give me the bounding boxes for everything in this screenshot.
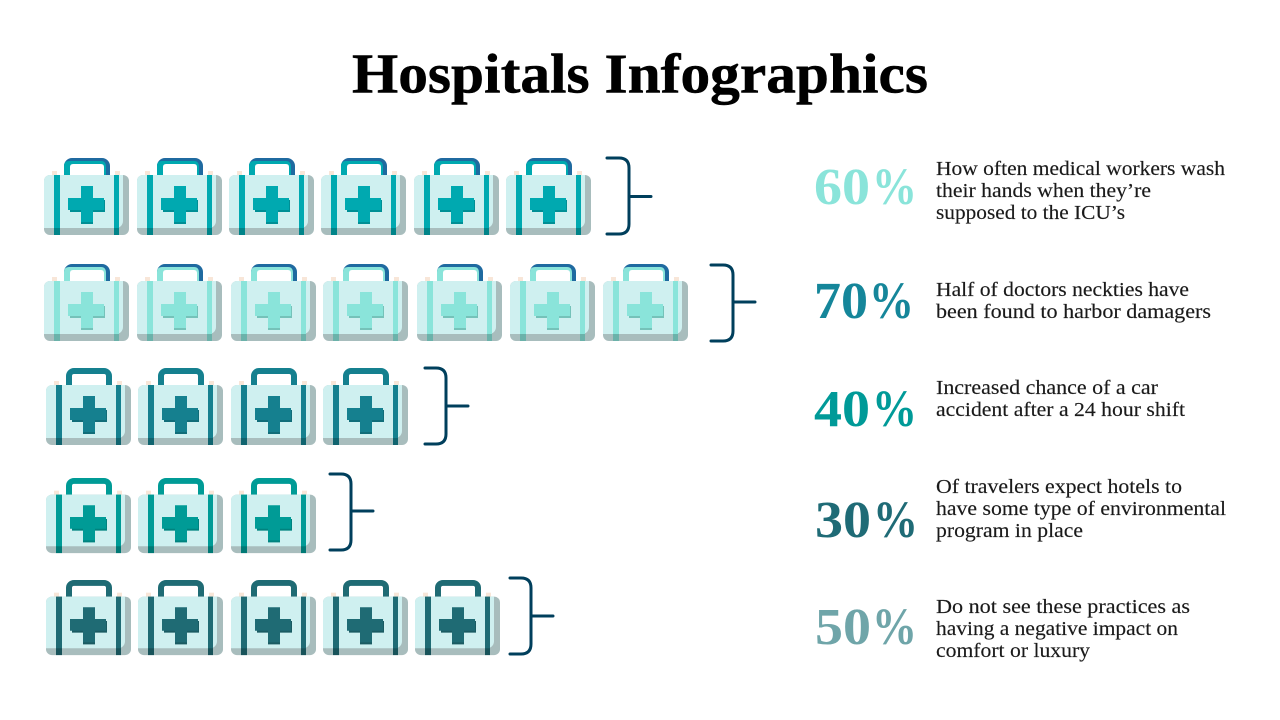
row 3: four first aid kits <box>46 371 408 445</box>
description: 50%: comfort or luxury <box>936 640 1090 662</box>
icon: first aid kit <box>231 371 316 445</box>
bracket: row 4 <box>330 474 373 550</box>
icon: first aid kit <box>46 583 131 655</box>
bracket: row 5 <box>510 578 553 654</box>
icon: first aid kit <box>231 481 316 553</box>
stat: 30%: % <box>873 492 918 549</box>
icon: first aid kit <box>415 583 500 655</box>
row 5: five first aid kits <box>46 583 500 655</box>
description: 70%: Half of doctors neckties have <box>936 279 1189 301</box>
description: 30%: Of travelers expect hotels to <box>936 476 1182 498</box>
bracket: row 1 <box>607 158 651 234</box>
description: 60%: supposed to the ICU’s <box>936 202 1125 224</box>
icon: first aid kit <box>323 583 408 655</box>
description: 50% <box>936 596 1190 662</box>
description: 60%: their hands when they’re <box>936 180 1151 202</box>
icon: first aid kit <box>231 267 316 341</box>
description: 50%: having a negative impact on <box>936 618 1178 640</box>
icon: first aid kit <box>138 371 223 445</box>
stat: 60%: 60 <box>814 159 870 216</box>
icon: first aid kit <box>414 161 499 235</box>
icon: first aid kit <box>510 267 595 341</box>
description: 40% <box>936 377 1185 421</box>
icon: first aid kit <box>137 267 222 341</box>
row 4: three first aid kits <box>46 481 316 553</box>
title: Hospitals Infographics <box>352 44 928 106</box>
description: 40%: Increased chance of a car <box>936 377 1158 399</box>
icon: first aid kit <box>138 481 223 553</box>
row 2: seven first aid kits <box>44 267 688 341</box>
stat: 30%: 30 <box>815 492 871 549</box>
stat: 50% <box>815 599 917 656</box>
description: 30% <box>936 476 1226 542</box>
description: 30%: have some type of environmental <box>936 498 1226 520</box>
icon: first aid kit <box>323 371 408 445</box>
stat: 40%: 40 <box>814 381 870 438</box>
description: 70%: been found to harbor damagers <box>936 301 1211 323</box>
stat: 70%: % <box>869 273 914 330</box>
stat: 40% <box>814 381 917 438</box>
stat: 60%: % <box>872 159 917 216</box>
description: 60% <box>936 158 1225 224</box>
stat: 50%: 50 <box>815 599 871 656</box>
description: 50%: Do not see these practices as <box>936 596 1190 618</box>
icon: first aid kit <box>46 371 131 445</box>
icon: first aid kit <box>138 583 223 655</box>
bracket: row 3 <box>425 368 468 444</box>
row 1: six first aid kits <box>44 161 591 235</box>
icon: first aid kit <box>229 161 314 235</box>
icon: first aid kit <box>46 481 131 553</box>
description: 70% <box>936 279 1211 323</box>
stat: 40%: % <box>872 381 917 438</box>
icon: first aid kit <box>506 161 591 235</box>
description: 40%: accident after a 24 hour shift <box>936 399 1185 421</box>
icon: first aid kit <box>603 267 688 341</box>
bracket: row 2 <box>711 265 755 341</box>
stat: 50%: % <box>872 599 917 656</box>
description: 60%: How often medical workers wash <box>936 158 1225 180</box>
stat: 60% <box>814 159 917 216</box>
icon: first aid kit <box>44 267 129 341</box>
description: 30%: program in place <box>936 520 1083 542</box>
stat: 70%: 70 <box>814 273 868 330</box>
icon: first aid kit <box>417 267 502 341</box>
icon: first aid kit <box>231 583 316 655</box>
stat: 70% <box>814 273 914 330</box>
icon: first aid kit <box>323 267 408 341</box>
icon: first aid kit <box>321 161 406 235</box>
icon: first aid kit <box>44 161 129 235</box>
stat: 30% <box>815 492 918 549</box>
icon: first aid kit <box>137 161 222 235</box>
